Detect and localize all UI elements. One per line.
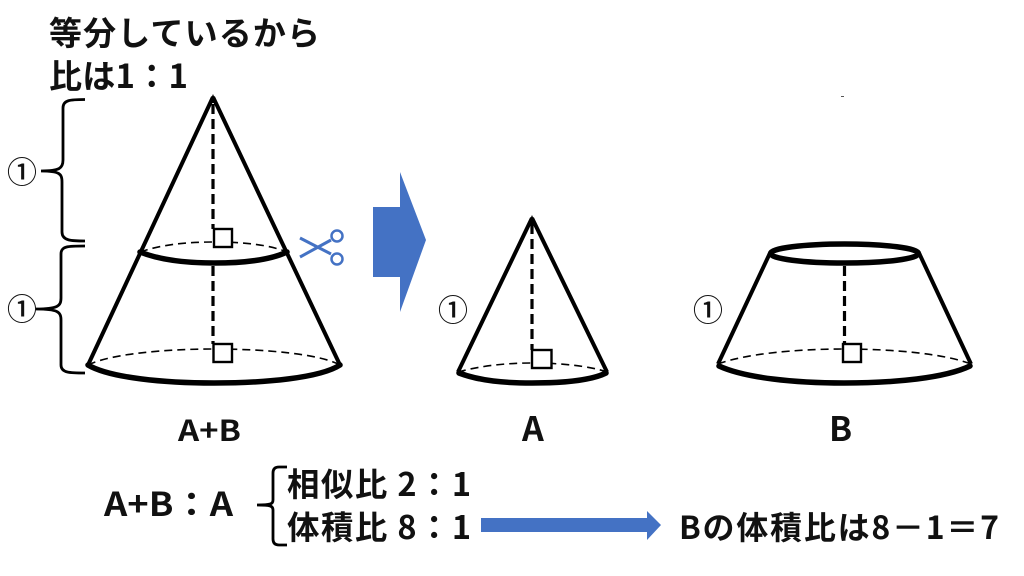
lower brace with label 1: ①: [7, 285, 37, 329]
right-angle mark: [532, 350, 552, 368]
right-angle mark: [843, 344, 861, 362]
heading: equal division means ratio 1:1: 等分しているから: [49, 7, 320, 55]
label 1 for frustum B: ①: [693, 286, 723, 330]
volume ratio: 体積比 8：1: [287, 502, 471, 549]
arrow to result: [481, 511, 661, 540]
upper brace with label 1: [7, 100, 85, 241]
right-angle marks: [214, 229, 232, 362]
result: volume ratio of B: Bの体積比は8－1＝7: [679, 503, 999, 549]
heading: equal division means ratio 1:1: 比は1：1: [49, 50, 188, 98]
cone A+B: [88, 94, 340, 383]
block arrow to the right: [373, 172, 426, 312]
stray mark: [841, 96, 844, 97]
icon: scissors: [300, 230, 342, 264]
frustum B: [718, 244, 971, 383]
label B: B: [829, 402, 852, 451]
lower brace with label 1: [7, 246, 85, 373]
label A+B: A+B: [177, 408, 241, 450]
heading: equal division means ratio 1:1: [49, 7, 320, 98]
similarity ratio: 相似比 2：1: [287, 459, 471, 506]
label 1 for cone A: ①: [438, 286, 468, 330]
bracket joining ratios: [257, 467, 287, 545]
ratio heading A+B : A: A+B：A: [103, 478, 234, 526]
cone A: [458, 215, 607, 383]
label A: A: [521, 402, 544, 451]
upper brace with label 1: ①: [7, 148, 37, 192]
